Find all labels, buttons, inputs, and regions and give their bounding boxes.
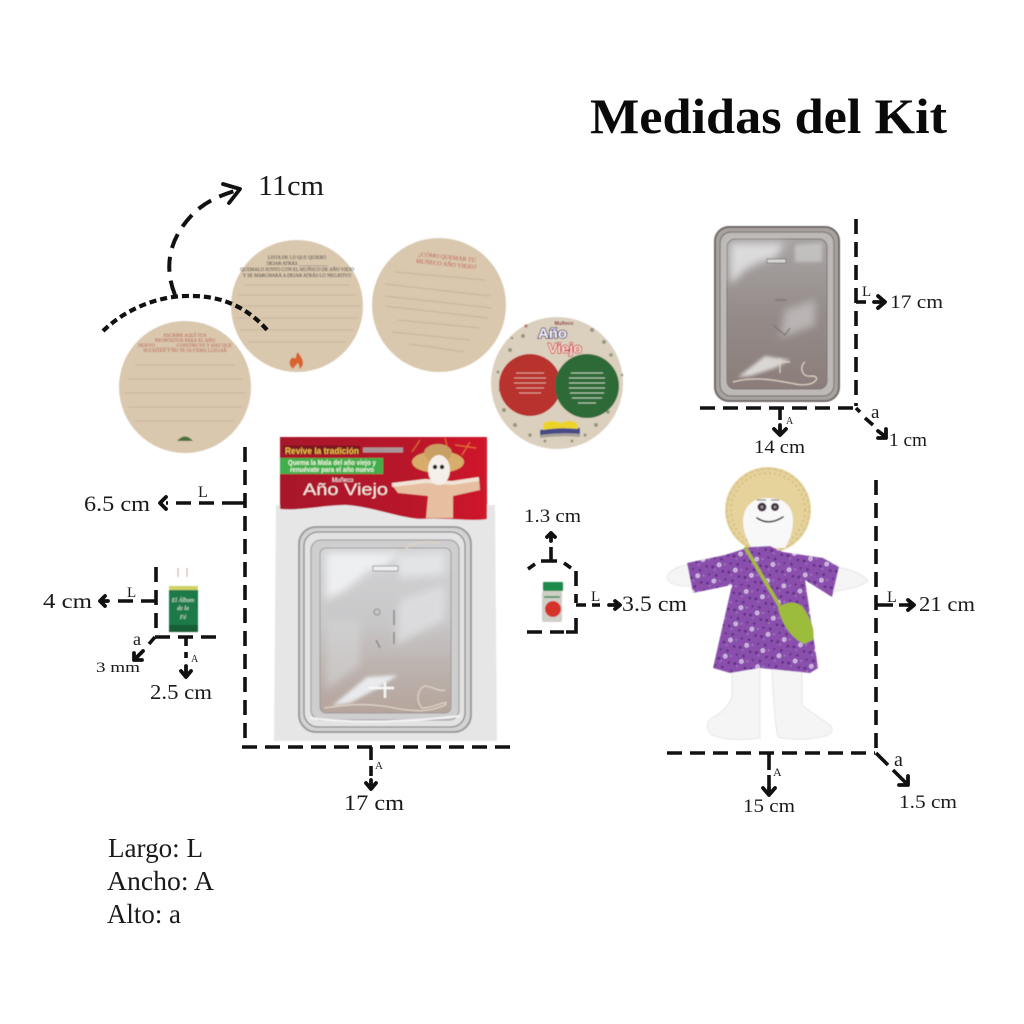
mini doll	[392, 444, 480, 518]
dimensions: green booklet	[100, 567, 216, 677]
label: L: L	[887, 589, 897, 606]
red header card	[280, 437, 487, 520]
label: 1 cm: 1 cm	[889, 430, 927, 451]
icon: green leaf	[177, 436, 193, 441]
label: 3 mm: 3 mm	[96, 660, 140, 676]
card 1: wish list	[119, 321, 251, 453]
panel: green booklet: Fé	[179, 615, 187, 621]
label: 21 cm: 21 cm	[919, 592, 975, 616]
card 2: burn list: DEJAR ATRÁS ____________	[266, 261, 328, 267]
face	[757, 500, 783, 522]
icon: flag	[540, 427, 580, 436]
label: a: a	[133, 629, 141, 649]
dimensions: doll	[667, 480, 914, 795]
card 2: burn list	[231, 240, 363, 372]
red header card: renuévate para el año nuevo	[290, 467, 374, 474]
card 4: cover: Muñeco	[555, 321, 573, 327]
label: L: L	[127, 585, 136, 601]
purple dress	[687, 546, 839, 673]
head	[743, 498, 793, 548]
legend: Largo: L	[108, 833, 203, 863]
legs	[707, 668, 760, 739]
label: A: A	[375, 760, 383, 772]
red header card: Revive la tradición	[285, 446, 359, 456]
label: 1.3 cm: 1.3 cm	[524, 506, 581, 527]
card 1: wish list: ESCRIBE AQUÍ TUS	[164, 333, 207, 339]
dimensions: packaged kit	[160, 447, 513, 789]
card 2: burn list: Y SE MARCHARÁ A DEJAR ATRÁS LO NEGATIVO	[243, 273, 352, 279]
card 3: instructions	[372, 238, 506, 372]
plastic bag	[274, 505, 497, 741]
panel: packaged kit	[274, 437, 497, 741]
card 2: burn list: QUEMALO JUNTO CON EL MUÑECO DE AÑO VIEJO	[240, 267, 354, 273]
label: 11cm: 11cm	[258, 171, 324, 202]
icon: flame	[290, 352, 303, 369]
card 4: cover: Año	[538, 325, 567, 341]
label: A: A	[786, 416, 794, 427]
label: 14 cm: 14 cm	[754, 437, 805, 458]
label: L: L	[198, 484, 208, 501]
panel: jar	[542, 582, 563, 622]
card 4: cover: Viejo	[548, 340, 582, 356]
panel: green booklet: El Álbum	[171, 596, 195, 604]
red header card: Año Viejo	[303, 480, 388, 499]
label: A: A	[191, 654, 199, 665]
panel: doll	[667, 467, 868, 739]
label: 3.5 cm: 3.5 cm	[622, 591, 687, 616]
title: Medidas del Kit	[590, 88, 947, 144]
card 3: instructions: ¿CÓMO QUEMAR TU	[418, 250, 477, 264]
label: 15 cm: 15 cm	[743, 796, 795, 817]
legend: Ancho: A	[107, 866, 215, 896]
card 2: burn list: LISTA DE LO QUE QUIERO	[268, 256, 327, 261]
panel: green booklet: de la	[177, 606, 189, 612]
card 4: cover	[491, 317, 623, 449]
arrow: 11 cm curved diameter arrow	[103, 184, 268, 331]
panel: green booklet	[169, 568, 198, 632]
label: 17 cm: 17 cm	[344, 790, 404, 815]
label: 17 cm: 17 cm	[890, 292, 943, 313]
red header card: Quema la Mala del año viejo y	[288, 460, 376, 467]
label: 1.5 cm: 1.5 cm	[899, 792, 957, 813]
panel: tray	[715, 227, 839, 401]
straw hat	[725, 467, 811, 553]
label: a: a	[894, 749, 903, 771]
card 3: instructions: MUÑECO AÑO VIEJO?	[416, 257, 477, 271]
red header card: Muñeco	[332, 478, 354, 484]
label: 6.5 cm: 6.5 cm	[84, 491, 150, 516]
label: L: L	[862, 284, 871, 300]
legend: Alto: a	[107, 899, 181, 929]
arms	[667, 563, 868, 592]
label: a: a	[871, 402, 880, 423]
label: L: L	[591, 589, 600, 605]
label: A: A	[773, 765, 782, 779]
bag with strap	[745, 547, 814, 644]
dimensions: jar	[527, 533, 620, 632]
tray	[299, 527, 471, 732]
dimensions: tray	[700, 219, 886, 438]
label: 2.5 cm: 2.5 cm	[150, 680, 212, 704]
card 1: wish list: PROPÓSITOS PARA EL AÑO	[155, 338, 216, 344]
panel: round cards	[119, 238, 623, 453]
card 1: wish list: SUCEDAN Y NO TE OLVIDES LLEGAR	[143, 349, 228, 354]
card 1: wish list: NUEVO ________ CONSTRUYE Y HAZ QUE	[138, 344, 232, 349]
label: 4 cm: 4 cm	[43, 589, 92, 613]
legend	[107, 833, 215, 929]
